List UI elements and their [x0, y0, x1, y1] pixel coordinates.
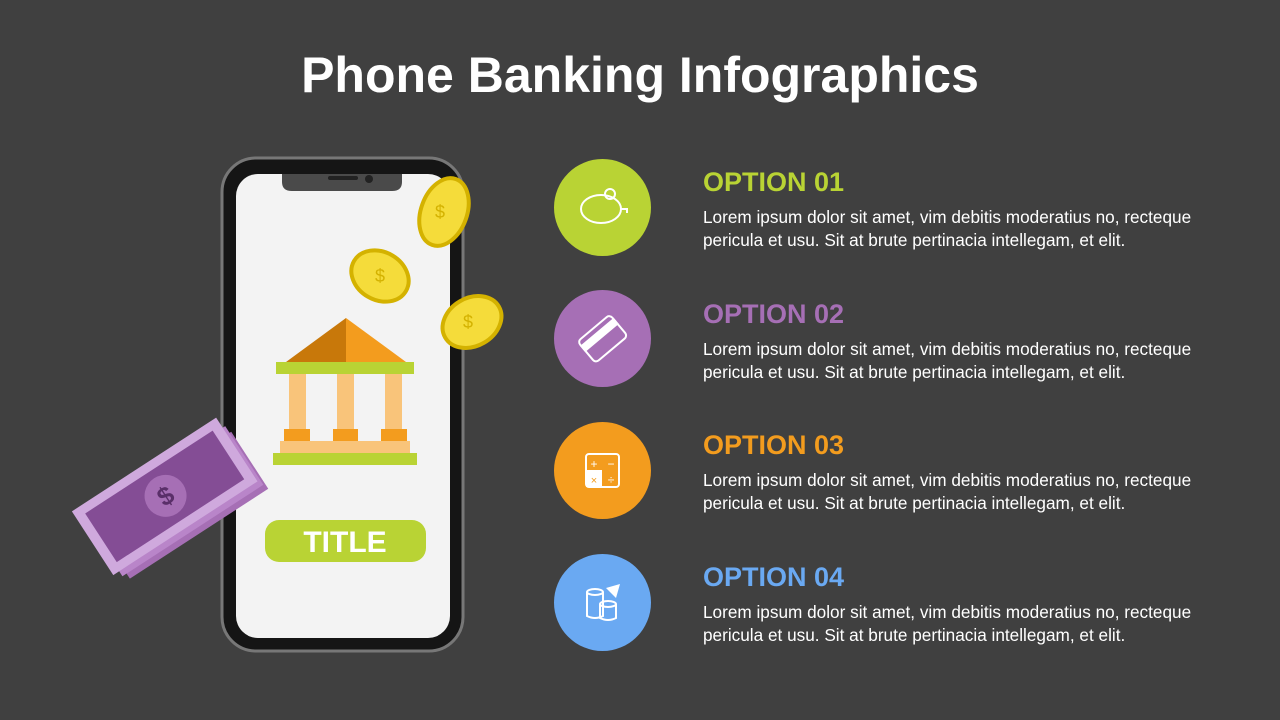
option 01: OPTION 01	[703, 167, 844, 197]
title button: TITLE	[303, 526, 387, 559]
icon circle: coins growth	[554, 554, 651, 651]
option 04: Lorem ipsum dolor sit amet, vim debitis moderatius no, recteque pericula et usu. Sit at brute pertinacia intellegam, et elit.	[703, 602, 1191, 645]
icon circle: calculator: −	[607, 457, 615, 471]
icon circle: piggy bank	[554, 159, 651, 256]
title button	[265, 520, 426, 562]
option 02: Lorem ipsum dolor sit amet, vim debitis moderatius no, recteque pericula et usu. Sit at brute pertinacia intellegam, et elit.	[703, 339, 1191, 382]
option 02: OPTION 02	[703, 299, 844, 329]
option 03: OPTION 03	[703, 430, 844, 460]
icon circle: calculator: ×	[591, 475, 597, 487]
icon: bank	[273, 318, 417, 465]
option 04: OPTION 04	[703, 562, 844, 592]
icon: cash bills: $	[151, 479, 180, 512]
option 01: Lorem ipsum dolor sit amet, vim debitis moderatius no, recteque pericula et usu. Sit at brute pertinacia intellegam, et elit.	[703, 207, 1191, 250]
title: Phone Banking Infographics	[301, 47, 979, 103]
icon circle: calculator	[554, 422, 651, 519]
icon: coins: $	[375, 266, 385, 286]
icon circle: calculator: +	[590, 457, 598, 471]
icon: cash bills	[72, 415, 268, 585]
phone illustration	[72, 156, 504, 652]
icon circle: calculator: ÷	[608, 473, 615, 487]
option 02	[703, 299, 1191, 382]
option 03: Lorem ipsum dolor sit amet, vim debitis moderatius no, recteque pericula et usu. Sit at brute pertinacia intellegam, et elit.	[703, 470, 1191, 513]
icon: coins	[342, 171, 511, 358]
option 04	[703, 562, 1191, 645]
option 01	[703, 167, 1191, 250]
icon circle: card	[554, 290, 651, 387]
phone body	[222, 158, 463, 651]
icon: coins: $	[463, 312, 473, 332]
icon: coins: $	[435, 202, 445, 222]
option 03	[703, 430, 1191, 513]
